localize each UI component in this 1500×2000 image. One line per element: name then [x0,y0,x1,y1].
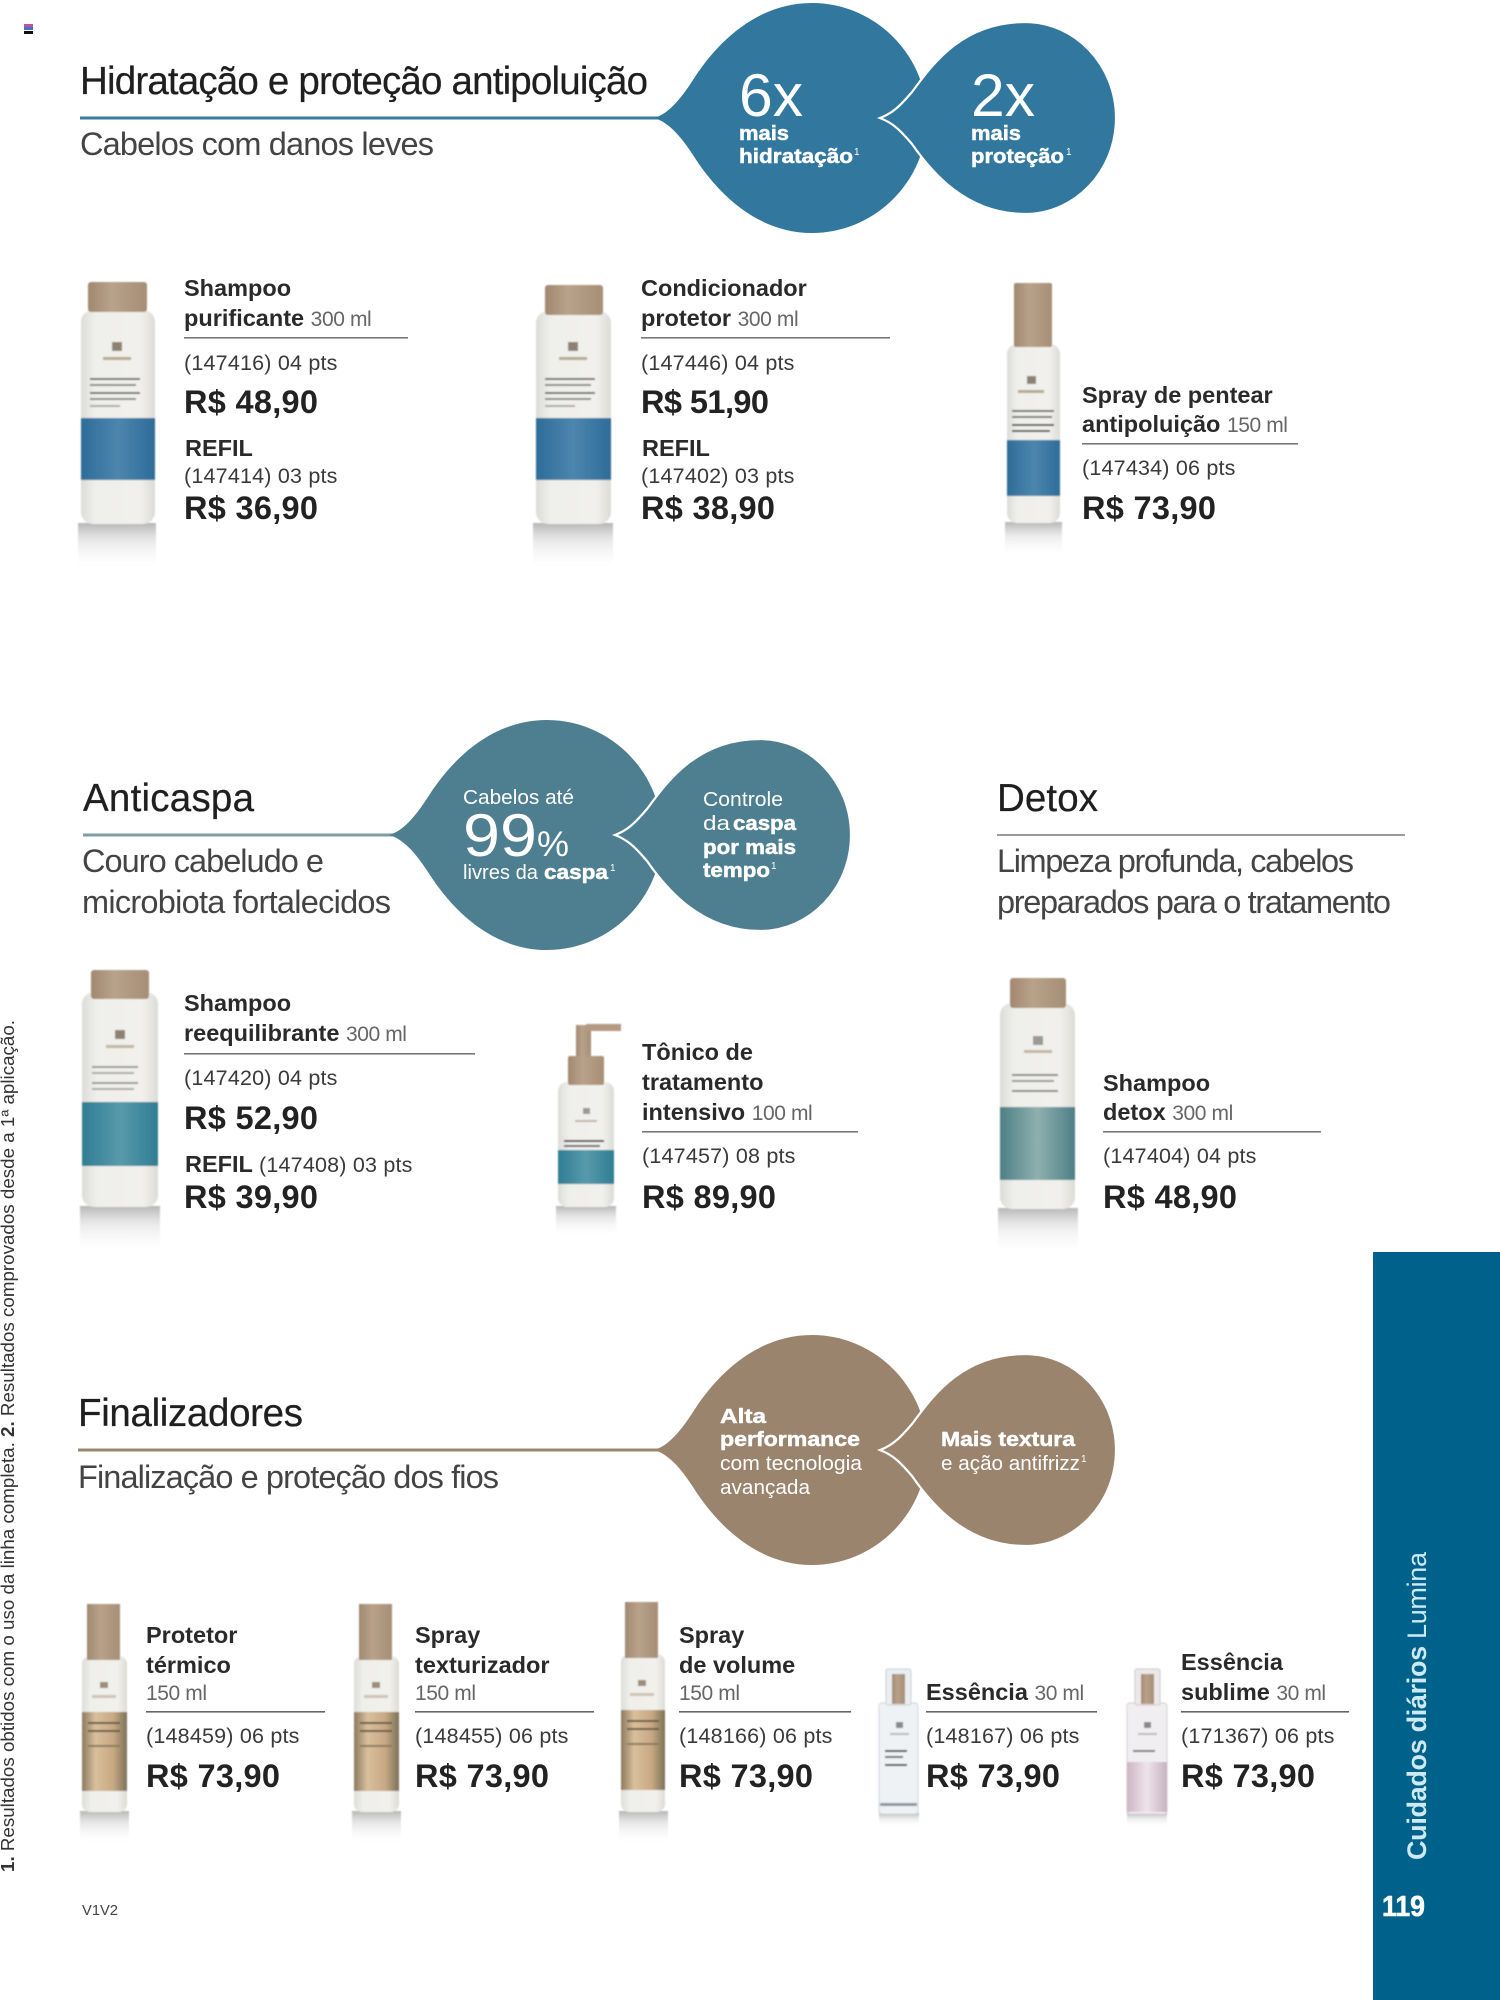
product: protective conditioner: R$ 38,90 [641,490,775,526]
product: thermal protector [146,1622,325,1794]
product: purifying shampoo: REFIL [185,435,253,461]
product image: thermal protector [80,1604,129,1845]
product: texturizing spray: texturizador [415,1652,550,1678]
badge: 99 percent free of dandruff [389,720,662,950]
product: texturizing spray [415,1622,594,1794]
product: rebalancing shampoo: (147420) 04 pts [184,1066,338,1090]
product: rebalancing shampoo: Shampoo [184,990,291,1016]
subtitle: Couro cabeludo e [82,843,324,879]
product image: intensive tonic [556,1024,621,1238]
product: anti-pollution spray: Spray de pentear [1082,382,1273,408]
page number: 119 [1382,1891,1425,1923]
product image: volume spray [619,1602,668,1845]
product: rebalancing shampoo: reequilibrante 300 ml [184,1020,407,1046]
product image: texturizing spray [352,1604,401,1845]
product: detox shampoo: detox 300 ml [1103,1099,1233,1125]
subtitle: Finalização e proteção dos fios [78,1459,499,1495]
product image: anti-pollution spray [1005,283,1062,558]
section: anti-dandruff heading: microbiota fortalecidos [82,884,391,920]
section: hydration heading [80,60,670,162]
badge: 6x more hydration [654,3,927,233]
badge: dandruff control: tempo [703,859,770,882]
badge: 99 percent free of dandruff: 1 [610,863,616,874]
version code: V1V2 [82,1902,118,1919]
product: purifying shampoo: purificante 300 ml [184,305,371,331]
product: detox shampoo: R$ 48,90 [1103,1179,1237,1215]
product: essence: R$ 73,90 [926,1758,1060,1794]
product: thermal protector: Protetor [146,1622,237,1648]
badge: high performance: com tecnologia [720,1452,863,1475]
product: thermal protector: (148459) 06 pts [146,1724,300,1748]
badge: 99 percent free of dandruff: 99 [463,802,537,869]
section: detox heading: preparados para o tratamento [997,884,1391,920]
badge: 6x more hydration: 1 [854,147,860,158]
product: thermal protector: R$ 73,90 [146,1758,280,1794]
product: detox shampoo: Shampoo [1103,1070,1210,1096]
product: purifying shampoo: R$ 36,90 [184,490,318,526]
product: purifying shampoo: R$ 48,90 [184,384,318,420]
badge: high performance: performance [720,1428,860,1451]
product: essence: (148167) 06 pts [926,1724,1080,1748]
badge: dandruff control: Controle [703,788,783,811]
badge: high performance: Alta [720,1405,767,1428]
badge: more texture: 1 [1081,1454,1087,1465]
sidebar [1373,1252,1500,2000]
badge: 2x more protection: 1 [1066,147,1072,158]
product image: protective conditioner [533,285,613,571]
product: purifying shampoo: (147416) 04 pts [184,351,338,375]
badge: 99 percent free of dandruff: livres da [463,861,539,884]
title: Detox [997,777,1098,820]
badge: 2x more protection: proteção [971,145,1064,168]
product: intensive tonic [642,1039,858,1215]
product: anti-pollution spray: R$ 73,90 [1082,490,1216,526]
section: detox heading [997,777,1405,920]
badge: more texture [880,1354,1116,1546]
product: sublime essence: R$ 73,90 [1181,1758,1315,1794]
badge: 99 percent free of dandruff: Cabelos até [463,786,574,809]
badge: dandruff control [615,739,851,931]
badge: 99 percent free of dandruff: % [537,825,569,864]
badge: dandruff control: 1 [771,861,777,872]
badge: 2x more protection: mais [971,122,1021,145]
product: intensive tonic: R$ 89,90 [642,1179,776,1215]
product image: detox shampoo [998,978,1078,1254]
product: purifying shampoo: (147414) 03 pts [184,464,338,488]
product: thermal protector: 150 ml [146,1682,207,1705]
badge: more texture: e ação antifrizz [941,1452,1080,1475]
title: Hidratação e proteção antipoluição [80,60,648,103]
product: protective conditioner: protetor 300 ml [641,305,798,331]
product: intensive tonic: tratamento [642,1069,763,1095]
product: purifying shampoo: Shampoo [184,275,291,301]
product: essence: Essência 30 ml [926,1679,1084,1705]
product: intensive tonic: (147457) 08 pts [642,1144,796,1168]
product: rebalancing shampoo: R$ 52,90 [184,1100,318,1136]
product: protective conditioner: R$ 51,90 [641,384,769,420]
title: Finalizadores [78,1392,303,1435]
badge: 2x more protection: 2x [971,62,1035,129]
product: rebalancing shampoo: R$ 39,90 [184,1179,318,1215]
product: purifying shampoo [184,275,408,526]
product: volume spray: R$ 73,90 [679,1758,813,1794]
section: anti-dandruff heading [82,777,403,920]
product: anti-pollution spray [1082,382,1298,526]
sidebar title: Cuidados diários Lumina [1402,1551,1432,1860]
title: Anticaspa [83,777,255,820]
product: texturizing spray: (148455) 06 pts [415,1724,569,1748]
product: rebalancing shampoo [184,990,475,1215]
badge: dandruff control: por mais [703,836,796,859]
product: volume spray: 150 ml [679,1682,740,1705]
product: volume spray: Spray [679,1622,744,1648]
product: intensive tonic: Tônico de [642,1039,753,1065]
product: detox shampoo [1103,1070,1321,1215]
product: protective conditioner: REFIL [642,435,710,461]
product: texturizing spray: 150 ml [415,1682,476,1705]
product: protective conditioner: (147446) 04 pts [641,351,795,375]
product: sublime essence: (171367) 06 pts [1181,1724,1335,1748]
product image: rebalancing shampoo [80,970,160,1254]
product: thermal protector: térmico [146,1652,231,1678]
product: protective conditioner [641,275,890,526]
product: volume spray: (148166) 06 pts [679,1724,833,1748]
registration mark [24,24,33,34]
product: sublime essence: sublime 30 ml [1181,1679,1326,1705]
badge: 99 percent free of dandruff: caspa [544,861,609,884]
badge: more texture: Mais textura [941,1428,1076,1451]
subtitle: Cabelos com danos leves [80,126,434,162]
badge: 2x more protection [880,22,1116,214]
subtitle: Limpeza profunda, cabelos [997,843,1354,879]
badge: 6x more hydration: 6x [739,62,803,129]
badge: dandruff control: da [703,812,731,835]
product: volume spray: de volume [679,1652,795,1678]
product: intensive tonic: intensivo 100 ml [642,1099,812,1125]
badge: dandruff control: caspa [733,812,797,835]
badge: 6x more hydration: mais [739,122,789,145]
product image: essence [879,1669,919,1827]
product: texturizing spray: Spray [415,1622,480,1648]
product: sublime essence: Essência [1181,1649,1284,1675]
badge: 6x more hydration: hidratação [739,145,853,168]
product: texturizing spray: R$ 73,90 [415,1758,549,1794]
product: protective conditioner: Condicionador [641,275,807,301]
badge: high performance [654,1335,927,1565]
product image: sublime essence [1127,1669,1167,1827]
product: essence [926,1679,1097,1794]
badge: high performance: avançada [720,1476,811,1499]
product: protective conditioner: (147402) 03 pts [641,464,795,488]
product: rebalancing shampoo: REFIL (147408) 03 pts [185,1151,413,1177]
product image: purifying shampoo [78,282,156,571]
product: sublime essence [1181,1649,1349,1794]
product: volume spray [679,1622,851,1794]
section: finishers heading [78,1392,668,1495]
product: anti-pollution spray: (147434) 06 pts [1082,456,1236,480]
product: anti-pollution spray: antipoluição 150 ml [1082,411,1288,437]
product: detox shampoo: (147404) 04 pts [1103,1144,1257,1168]
